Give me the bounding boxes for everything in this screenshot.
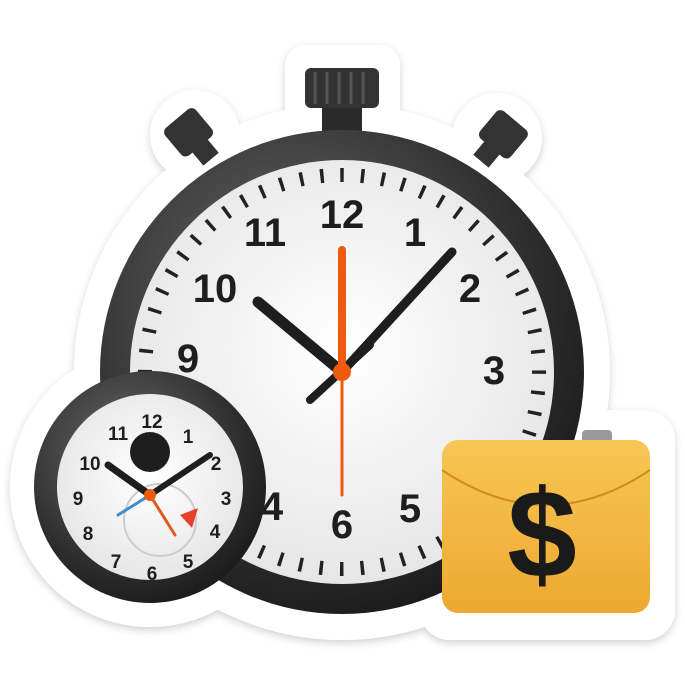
numerals: 5 [399,487,421,531]
hands [258,250,452,495]
briefcase with dollar sign [442,430,650,613]
numerals: 4 [261,485,284,529]
small clock: 11 [108,424,128,445]
large stopwatch [100,130,584,614]
small clock: 12 [141,412,163,433]
briefcase with dollar sign: $ [507,465,577,604]
numerals: 2 [459,267,481,311]
numerals: 10 [193,267,237,311]
numerals: 11 [244,211,286,255]
small clock: 2 [211,454,221,475]
numerals: 12 [320,193,364,237]
numerals: 6 [331,503,353,547]
small clock: 8 [83,524,93,545]
small clock: 4 [210,522,221,543]
numerals: 1 [404,211,426,255]
side buttons [162,106,530,174]
small clock: 10 [79,454,101,475]
small clock [34,371,266,603]
small clock: 3 [221,489,231,510]
numerals: 3 [483,349,505,393]
numerals: 9 [177,337,199,381]
small clock: 6 [147,564,157,585]
small clock: 1 [183,427,194,448]
small clock: 9 [73,489,83,510]
stopwatch crown [305,68,379,132]
small clock: 7 [111,552,121,573]
numerals [177,193,505,547]
small clock: 5 [183,552,194,573]
